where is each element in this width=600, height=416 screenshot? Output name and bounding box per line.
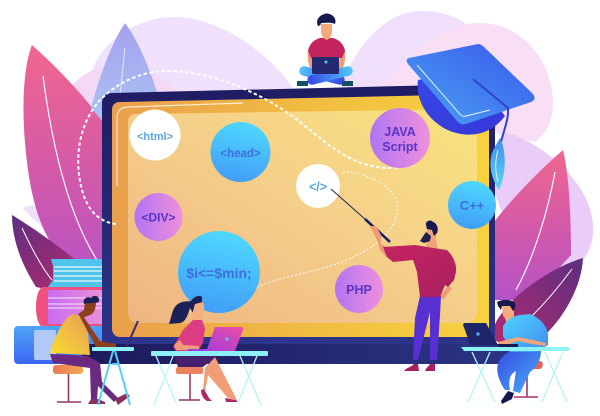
person: right student with laptop bbox=[461, 300, 569, 404]
shoes bbox=[201, 389, 238, 402]
desk top bbox=[461, 347, 569, 351]
laptop lid bbox=[102, 84, 495, 345]
bubble: head: <head> bbox=[220, 148, 261, 160]
shoes bbox=[297, 81, 353, 86]
shirt bbox=[308, 38, 345, 58]
laptop base bbox=[82, 344, 520, 364]
arms bbox=[308, 50, 345, 71]
dark leaf vein bbox=[22, 228, 52, 280]
cap board bbox=[407, 44, 534, 124]
neck and face bbox=[425, 228, 438, 249]
stool bbox=[176, 367, 203, 400]
pink top bbox=[173, 320, 205, 351]
laptop screen panel bbox=[128, 109, 477, 323]
tassel cord bbox=[473, 79, 508, 142]
person: left student with laptop bbox=[50, 296, 138, 405]
person: teacher pointing bbox=[331, 189, 456, 371]
background blobs bbox=[22, 11, 593, 290]
desk legs bbox=[468, 352, 567, 402]
desk top bbox=[92, 347, 134, 351]
laptop bbox=[127, 321, 138, 346]
keyboard bbox=[498, 344, 518, 347]
stack of books bbox=[14, 259, 114, 364]
desk top bbox=[151, 351, 268, 356]
trousers bbox=[497, 351, 541, 393]
laptop screen frame bbox=[112, 94, 489, 337]
blue shirt bbox=[503, 314, 548, 352]
left leaf vein bbox=[43, 76, 97, 260]
forearm and hand bbox=[370, 226, 389, 258]
thin dashed pointer path bbox=[222, 172, 398, 313]
bubble: PHP: PHP bbox=[346, 283, 372, 297]
person: woman with laptop bbox=[151, 296, 268, 405]
red sweater bbox=[383, 245, 456, 297]
screen highlight bbox=[117, 103, 243, 186]
head bbox=[78, 302, 96, 318]
bubble: code tag: </> bbox=[309, 180, 327, 194]
bubble: C++ bbox=[448, 181, 496, 229]
right dark leaf bbox=[493, 258, 583, 352]
bubble: JAVA Script: Script bbox=[382, 140, 419, 154]
arm bbox=[174, 340, 199, 350]
bubble: html: <html> bbox=[137, 131, 173, 143]
shoes bbox=[88, 393, 130, 405]
laptop bbox=[463, 323, 498, 345]
desk legs bbox=[98, 351, 130, 405]
hair bbox=[317, 14, 336, 26]
face and neck bbox=[192, 302, 204, 322]
bubble: JAVA Script: JAVA bbox=[384, 125, 416, 139]
skirt bbox=[174, 356, 217, 367]
bubble: PHP bbox=[335, 265, 383, 313]
laptop bbox=[312, 57, 339, 74]
cap bowl bbox=[418, 70, 505, 135]
laptop bbox=[82, 84, 520, 364]
bubble: code tag bbox=[296, 164, 340, 208]
yellow shirt bbox=[50, 314, 90, 355]
pointer stick bbox=[331, 189, 390, 242]
right pink leaf bbox=[494, 150, 571, 300]
bubble: head bbox=[210, 122, 270, 182]
bubble: code expression: $i<=$min; bbox=[186, 265, 252, 281]
left pink leaf bbox=[23, 45, 106, 290]
beard bbox=[420, 232, 431, 243]
arm bbox=[498, 337, 546, 346]
shoe bbox=[501, 391, 514, 404]
desk legs bbox=[154, 356, 261, 405]
stool bbox=[53, 365, 83, 402]
top teal book bbox=[48, 259, 106, 287]
arm bbox=[79, 315, 116, 347]
dark left leaf bbox=[12, 215, 78, 290]
bubble: html bbox=[130, 110, 180, 160]
stool bbox=[514, 361, 543, 397]
crossed legs bbox=[304, 71, 348, 80]
hair bbox=[84, 296, 99, 304]
dashed orbit path bbox=[78, 71, 414, 224]
trousers bbox=[413, 296, 441, 360]
trousers bbox=[50, 354, 118, 402]
graduation cap bbox=[407, 44, 534, 190]
cap edge highlight bbox=[417, 65, 490, 116]
bubble: C++: C++ bbox=[460, 198, 485, 213]
hair bbox=[497, 300, 515, 311]
bubble: DIV: <DIV> bbox=[141, 210, 176, 224]
right leaf vein bbox=[516, 172, 555, 290]
right dark leaf vein bbox=[532, 269, 572, 316]
hand on waist bbox=[440, 286, 452, 300]
bubble: DIV bbox=[134, 193, 182, 241]
blue-violet leaf bbox=[91, 23, 157, 122]
bubble: JAVA Script bbox=[370, 108, 430, 168]
hair bbox=[426, 221, 438, 236]
head bbox=[321, 24, 332, 40]
neck and face bbox=[502, 306, 514, 325]
hair bbox=[169, 296, 202, 324]
laptop bbox=[188, 327, 243, 351]
middle pink book bbox=[36, 287, 106, 327]
shoes bbox=[404, 364, 435, 371]
bottom blue book bbox=[14, 326, 114, 364]
legs bbox=[203, 357, 237, 400]
bubble: code expression bbox=[178, 231, 260, 313]
person: sitting on laptop bbox=[297, 14, 353, 86]
blue leaf vein bbox=[120, 48, 125, 94]
tassel bbox=[490, 138, 505, 190]
